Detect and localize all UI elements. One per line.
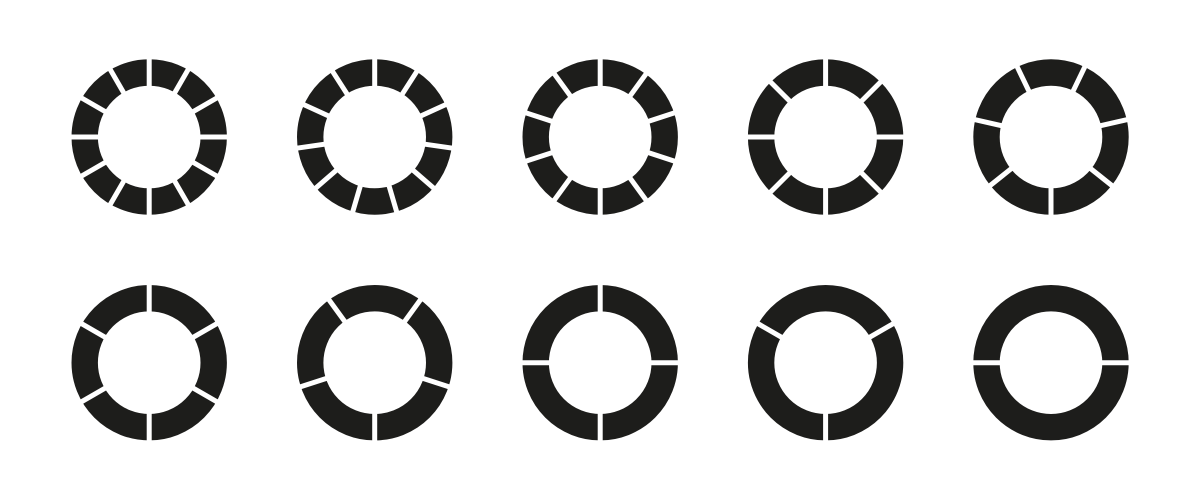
ring: 7 segments xyxy=(969,61,1133,221)
ring: 5 segments xyxy=(295,295,455,447)
ring: 10 segments xyxy=(520,53,680,221)
ring: 6 segments xyxy=(76,279,222,447)
ring: 8 segments xyxy=(742,53,910,221)
ring: 3 segments xyxy=(753,298,898,447)
ring: 11 segments xyxy=(292,53,458,218)
ring: 12 segments xyxy=(65,53,233,221)
ring: 4 segments xyxy=(516,279,684,447)
ring: 2 segments xyxy=(967,298,1135,427)
